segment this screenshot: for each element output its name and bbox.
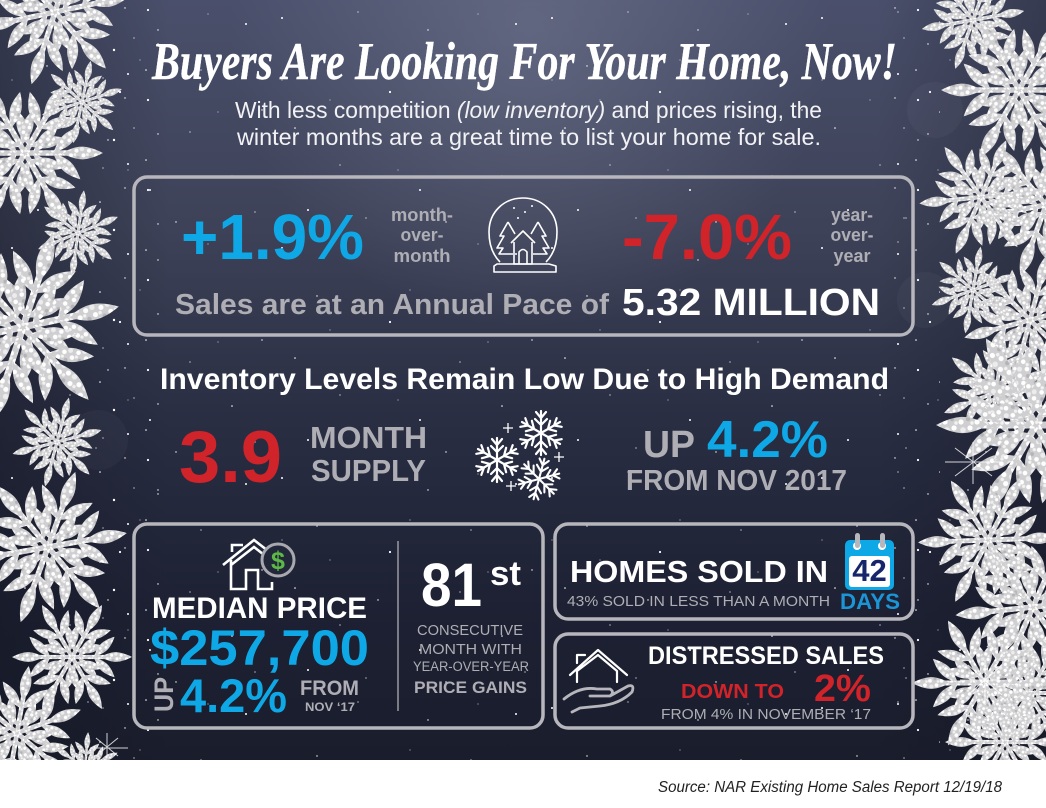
icon: three snowflakes: [475, 411, 565, 505]
date label: NOV ‘17: [305, 700, 355, 714]
month-over-month label: month-: [391, 205, 453, 225]
year-over-year label: [830, 205, 874, 266]
annual pace text: Sales are at an Annual Pace of: [175, 289, 609, 321]
down to label: DOWN TO: [681, 681, 784, 703]
homes sold heading: HOMES SOLD IN: [570, 554, 828, 589]
subtitle: winter months are a great time to list your home for sale.: [236, 124, 821, 150]
icon: calendar: 42: [852, 553, 887, 588]
consecutive month description: PRICE GAINS: [414, 678, 527, 697]
icon: house on open hand: [564, 650, 633, 712]
rotated up label: UP: [149, 677, 179, 712]
sparkles on snowflakes: [90, 442, 1010, 758]
month-over-month label: over-: [400, 225, 444, 245]
ordinal suffix: st: [490, 555, 521, 593]
median price value: $257,700: [150, 620, 369, 676]
icon: snow globe: [489, 198, 557, 272]
heading: inventory: Inventory Levels Remain Low Due to High Demand: [160, 363, 889, 396]
panel: distressed sales: [555, 634, 913, 728]
panel: sales pace: [134, 177, 913, 335]
consecutive month description: MONTH WITH: [419, 641, 522, 658]
inventory change: 4.2%: [707, 411, 828, 469]
month supply label: SUPPLY: [311, 453, 426, 488]
inventory change: UP: [643, 424, 695, 466]
year-over-year label: year: [834, 246, 870, 266]
year-over-year change: -7.0%: [622, 201, 792, 273]
subtitle: With less competition (low inventory) and prices rising, the: [235, 97, 822, 123]
left column of glitter snowflakes: [0, 0, 132, 760]
distressed sales detail: FROM 4% IN NOVEMBER ‘17: [661, 707, 871, 723]
from label: FROM: [300, 677, 359, 700]
icon: calendar: [845, 533, 894, 590]
month supply label: [310, 420, 427, 488]
distressed sales heading: DISTRESSED SALES: [648, 642, 884, 670]
consecutive month description: CONSECUTIVE: [417, 622, 523, 639]
year-over-year label: over-: [830, 225, 874, 245]
panel: days on market: [555, 524, 913, 619]
month-over-month label: [391, 205, 453, 266]
source note: Source: NAR Existing Home Sales Report 12/19/18: [658, 779, 1002, 796]
icon: house with dollar coin: [223, 540, 294, 589]
consecutive month description: [413, 622, 529, 697]
month-over-month label: month: [394, 246, 450, 266]
distressed sales value: 2%: [814, 668, 871, 710]
month supply label: MONTH: [310, 420, 427, 455]
median price change: 4.2%: [180, 669, 287, 722]
days label: DAYS: [840, 589, 900, 614]
annual pace value: 5.32 MILLION: [622, 282, 880, 324]
subtitle: [235, 97, 822, 150]
right column of glitter snowflakes: [914, 0, 1046, 760]
icon: house with dollar coin: $: [271, 547, 285, 575]
inventory change: FROM NOV 2017: [626, 465, 847, 497]
panel: median price: [134, 524, 543, 728]
inventory month supply value: 3.9: [179, 417, 282, 498]
median price label: MEDIAN PRICE: [152, 592, 367, 625]
homes sold detail: 43% SOLD IN LESS THAN A MONTH: [567, 593, 830, 610]
inventory change: [626, 411, 847, 497]
year-over-year label: year-: [831, 205, 873, 225]
consecutive month description: YEAR-OVER-YEAR: [413, 659, 529, 674]
consecutive month value: 81: [421, 551, 482, 619]
month-over-month change: +1.9%: [181, 201, 364, 273]
